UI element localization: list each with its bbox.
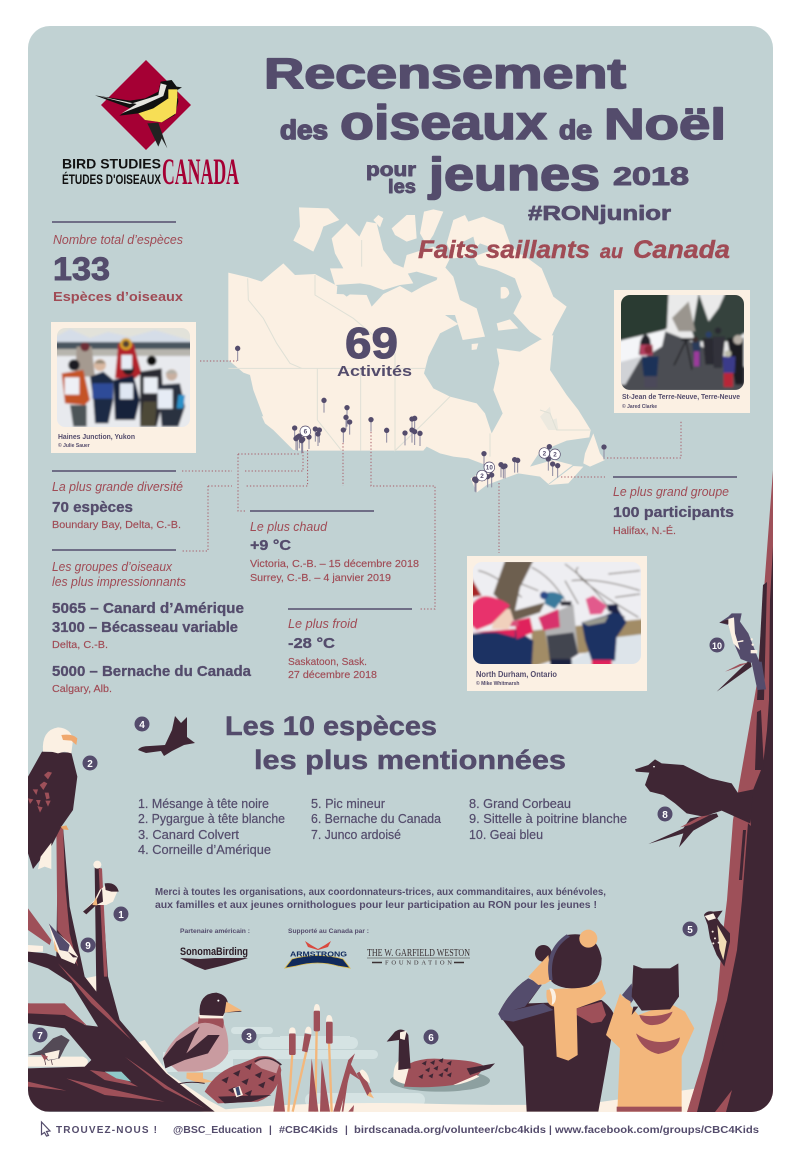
title: jeunes [428, 148, 600, 200]
activity count: Activités [337, 363, 412, 380]
bird 1: chickadee [83, 883, 119, 914]
stat: impressive flocks: les plus impressionnants [52, 574, 186, 589]
activity pins: 2 [553, 452, 557, 459]
stat: warmest [250, 511, 419, 584]
bird 3: mallard female [205, 1056, 281, 1103]
bird 9: nuthatch [49, 923, 78, 964]
child 1 [498, 930, 615, 1112]
species list: 5. Pic mineur [311, 797, 385, 811]
stat: impressive flocks: Delta, C.-B. [52, 639, 108, 651]
stat: impressive flocks: 5000 – Bernache du Canada [52, 664, 252, 680]
activity count: 69 [345, 319, 398, 368]
activity pins [235, 346, 607, 492]
title: les [388, 177, 416, 198]
rose highlights [28, 827, 205, 1108]
badge 2 [82, 756, 98, 770]
logo text: ÉTUDES D'OISEAUX [62, 171, 161, 187]
species list: 1. Mésange à tête noire [138, 797, 269, 811]
activity pins: 6 [304, 429, 308, 436]
partner labels: Supporté au Canada par : [288, 928, 369, 935]
photo: Haines Junction [50, 320, 196, 453]
footer: #CBC4Kids [279, 1125, 338, 1136]
species list [138, 797, 627, 857]
footer: | [345, 1125, 348, 1136]
snowy ground [200, 1088, 720, 1112]
activity count [337, 319, 412, 380]
badge 4: 4 [139, 720, 145, 731]
stat: coldest: Le plus froid [288, 616, 358, 631]
badge 2: 2 [87, 759, 93, 770]
child 2 [606, 963, 694, 1112]
footer: @BSC_Education [173, 1125, 262, 1136]
arctic islands [262, 207, 605, 485]
logo: Armstrong: ARMSTRONG [290, 952, 348, 958]
subtitle [418, 236, 730, 264]
badge 10 [710, 638, 724, 652]
species list: 4. Corneille d’Amérique [138, 843, 271, 857]
cattails [273, 1004, 374, 1112]
stat: impressive flocks: Calgary, Alb. [52, 683, 112, 695]
title: Recensement [264, 50, 626, 98]
badge 9: 9 [85, 941, 91, 952]
footer [42, 1122, 759, 1136]
species list: 6. Bernache du Canada [311, 812, 441, 826]
logo: W. Garfield Weston Foundation: THE W. GARFIELD WESTON [367, 947, 470, 959]
species list: 7. Junco ardoisé [311, 828, 401, 842]
tree cracks and bark details [726, 582, 767, 1005]
logo: SonomaBirding [180, 946, 248, 970]
logo: SonomaBirding: SonomaBirding [180, 946, 248, 958]
stat: total species: Espèces d’oiseaux [53, 289, 184, 304]
title: de [559, 115, 592, 145]
logo: W. Garfield Weston Foundation: FOUNDATION [385, 960, 452, 966]
bird 4: crow [138, 716, 195, 756]
water and snow bands [163, 1027, 425, 1107]
photo: North Durham [465, 554, 650, 691]
ice patch [105, 1072, 131, 1082]
title: des [280, 115, 328, 145]
badge 1: 1 [118, 910, 124, 921]
badge 4 [134, 716, 150, 732]
title: 2018 [613, 163, 689, 191]
logo text [62, 152, 239, 193]
stat: coldest: -28 °C [288, 636, 336, 652]
species list: 9. Sittelle à poitrine blanche [469, 812, 627, 826]
badge 10: 10 [712, 641, 722, 651]
photo: St-Jean de Terre-Neuve: St-Jean de Terre-Neuve, Terre-Neuve [622, 394, 740, 401]
photo: Haines Junction: © Julie Sauer [58, 442, 90, 449]
footer: | [269, 1125, 272, 1136]
stat: warmest: +9 °C [250, 538, 292, 554]
footer: birdscanada.org/volunteer/cbc4kids [354, 1125, 546, 1136]
badge 8 [658, 806, 672, 822]
province borders [228, 240, 590, 457]
dotted connector lines [182, 361, 681, 609]
bird 10: blue jay [717, 613, 766, 692]
snow ledge under junco [28, 1057, 88, 1067]
snow cap [93, 861, 101, 869]
stat: greatest diversity [52, 471, 183, 531]
icon: cursor arrow [42, 1122, 50, 1136]
stat: total species: 133 [53, 251, 110, 287]
photo: North Durham: North Durham, Ontario [476, 670, 557, 679]
thank-you text: aux familles et aux jeunes ornithologues pour leur participation au RON pour les jeunes ! [155, 900, 597, 911]
title: Noël [604, 100, 726, 149]
stat: impressive flocks [52, 550, 252, 695]
stat: largest group: Le plus grand groupe [613, 484, 729, 499]
footer: www.facebook.com/groups/CBC4Kids [554, 1125, 759, 1136]
left tree [28, 827, 228, 1112]
photo: St-Jean de Terre-Neuve [612, 288, 752, 413]
subtitle: au [600, 242, 623, 263]
photo: Haines Junction: Haines Junction, Yukon [58, 432, 135, 441]
stat: greatest diversity: 70 espèces [52, 500, 133, 516]
stat: total species [52, 222, 184, 304]
thank-you text [155, 887, 606, 911]
stat: largest group: Halifax, N.-É. [613, 524, 676, 537]
activity pins: 2 [543, 450, 547, 457]
stat: largest group: 100 participants [613, 505, 734, 521]
stat: coldest: Saskatoon, Sask. [288, 656, 367, 668]
species list: 2. Pygargue à tête blanche [138, 812, 285, 826]
heading: top 10 species: Les 10 espèces [225, 711, 437, 741]
badge 3 [242, 1028, 256, 1044]
badge 6: 6 [428, 1033, 434, 1044]
illustration scene [28, 470, 773, 1112]
partner labels: Partenaire américain : [180, 928, 250, 935]
title: #RONjunior [528, 203, 671, 225]
heading: top 10 species: les plus mentionnées [254, 745, 566, 775]
bird 8: raven [635, 759, 753, 847]
badge 6 [424, 1030, 438, 1044]
stat: warmest: Victoria, C.-B. – 15 décembre 2018 [250, 558, 419, 570]
stat: impressive flocks: 5065 – Canard d’Amérique [52, 601, 244, 617]
stat: coldest: 27 décembre 2018 [288, 669, 377, 681]
logo: Armstrong [285, 941, 350, 968]
species list: 10. Geai bleu [469, 828, 543, 842]
title: pour [366, 160, 417, 181]
badge 3: 3 [246, 1032, 252, 1043]
thank-you text: Merci à toutes les organisations, aux coordonnateurs-trices, aux commanditaires, aux bénévoles, [155, 887, 606, 898]
species list: 3. Canard Colvert [138, 828, 240, 842]
badge 1 [114, 906, 128, 922]
bird 5: woodpecker [704, 911, 730, 967]
children with binoculars [498, 930, 694, 1112]
bird 2: bald eagle [28, 727, 77, 869]
subtitle: Canada [633, 236, 730, 264]
right tree [687, 470, 773, 1112]
logo text: BIRD STUDIES [62, 156, 161, 172]
stat: warmest: Surrey, C.-B. – 4 janvier 2019 [250, 572, 391, 584]
logo: Bird Studies Canada [62, 60, 239, 193]
tree trunk [28, 827, 215, 1112]
stat: largest group [613, 477, 737, 537]
stat: total species: Nombre total d’espèces [53, 232, 183, 247]
stat: warmest: Le plus chaud [250, 519, 328, 534]
badge 7: 7 [37, 1031, 43, 1042]
species list: 8. Grand Corbeau [469, 797, 571, 811]
bird 6: Canada goose [387, 1029, 495, 1092]
title: oiseaux [340, 97, 547, 150]
activity pins: 10 [486, 465, 493, 472]
stat: impressive flocks: Les groupes d’oiseaux [52, 559, 172, 574]
badge 7 [32, 1028, 48, 1042]
subtitle: Faits saillants [418, 236, 590, 264]
badge 8: 8 [662, 810, 668, 821]
footer: | [549, 1125, 552, 1136]
logo: W. Garfield Weston Foundation [367, 947, 470, 966]
stat: greatest diversity: La plus grande diversité [52, 479, 183, 494]
heading: top 10 species [225, 711, 566, 775]
photo: North Durham: © Mike Whitmarsh [476, 680, 519, 687]
stat: coldest [288, 609, 412, 681]
badge 9 [80, 938, 96, 952]
footer: TROUVEZ-NOUS ! [56, 1125, 157, 1136]
activity pins: 2 [480, 473, 484, 480]
snow on branches [28, 945, 228, 1111]
icon: red diamond with bird [95, 60, 191, 150]
partner labels [180, 928, 369, 935]
bird 7: junco [28, 1035, 70, 1065]
inner water: bays and lakes [338, 237, 558, 430]
badge 5 [682, 922, 698, 936]
mainland [228, 263, 591, 493]
map of Canada [228, 207, 607, 493]
bird 3: mallard male [163, 993, 242, 1087]
photo: St-Jean de Terre-Neuve: © Jared Clarke [622, 403, 657, 410]
stat: impressive flocks: 3100 – Bécasseau variable [52, 620, 238, 636]
title [264, 50, 726, 225]
badge 5: 5 [687, 925, 693, 936]
stat: greatest diversity: Boundary Bay, Delta, C.-B. [52, 519, 181, 531]
text: CANADA [162, 152, 239, 193]
